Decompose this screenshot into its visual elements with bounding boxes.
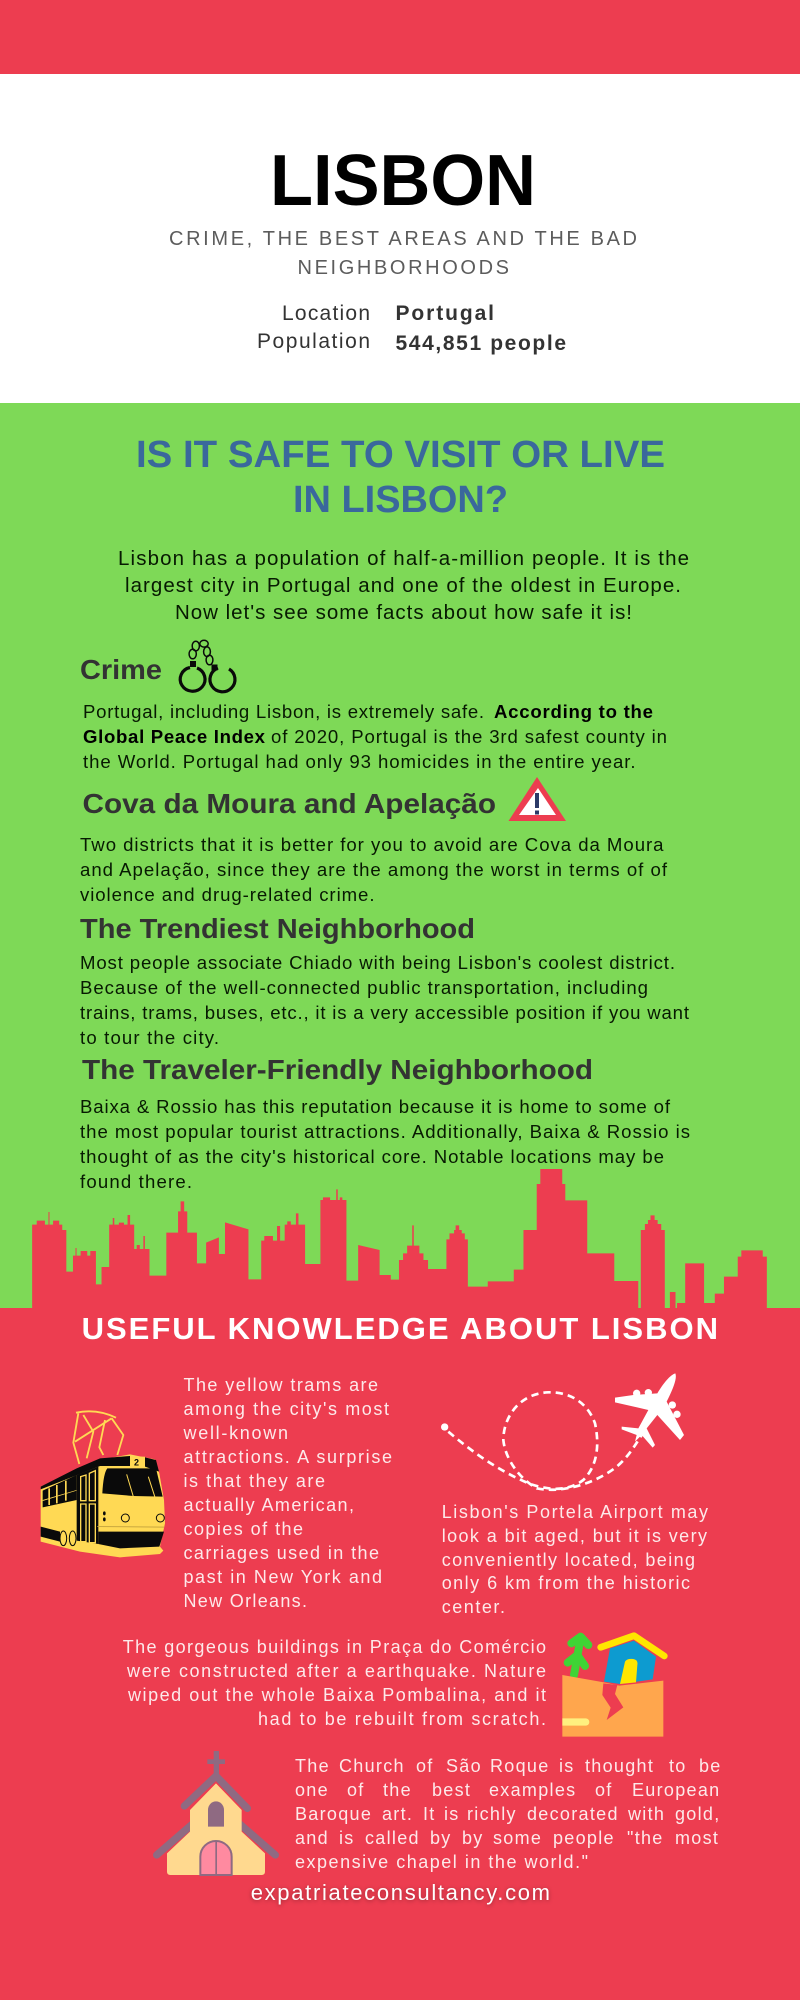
panel: useful knowledge	[0, 1308, 800, 2000]
church text: richly	[467, 1804, 523, 1824]
church text: art.	[382, 1804, 420, 1824]
tram text: past in New York and	[184, 1567, 382, 1587]
church text: "the	[627, 1828, 670, 1848]
panel: safety	[0, 403, 800, 1308]
Cova da Moura heading: Cova da Moura and Apelação	[82, 788, 496, 819]
icon: earthquake house	[562, 1636, 664, 1737]
church text: of	[595, 1780, 619, 1800]
trendiest text: Most people associate Chiado with being Lisbon's coolest district.	[80, 952, 675, 973]
useful knowledge heading: USEFUL KNOWLEDGE ABOUT LISBON	[82, 1311, 718, 1346]
church text: be	[699, 1756, 722, 1776]
church text: decorated	[527, 1804, 625, 1824]
tram text: carriages used in the	[184, 1543, 379, 1563]
trendiest text: Because of the well-connected public transportation, including	[80, 977, 648, 998]
location and population facts: Population	[257, 330, 370, 353]
Cova da Moura text: Two districts that it is better for you to avoid are Cova da Moura	[80, 834, 664, 855]
church text: is	[339, 1828, 361, 1848]
icon: yellow tram: 2	[134, 1458, 139, 1468]
tram text: well-known	[182, 1423, 288, 1443]
church text: is	[559, 1756, 581, 1776]
panel: top band	[0, 0, 800, 74]
airport text	[442, 1502, 708, 1617]
subtitle: CRIME, THE BEST AREAS AND THE BAD	[169, 228, 637, 250]
church text: of	[416, 1756, 440, 1776]
tram text: among the city's most	[184, 1399, 389, 1419]
church text: some	[493, 1828, 549, 1848]
church text: It	[423, 1804, 442, 1824]
trendiest text: trains, trams, buses, etc., it is a very accessible position if you want	[80, 1002, 690, 1023]
intro text	[118, 547, 689, 624]
church text: and	[295, 1828, 335, 1848]
subtitle	[169, 228, 637, 279]
tram text	[182, 1375, 392, 1611]
footer website: expatriateconsultancy.com	[251, 1880, 550, 1905]
church text: to	[669, 1756, 693, 1776]
airport text: only 6 km from the historic	[442, 1573, 690, 1593]
intro text: Now let's see some facts about how safe it is!	[175, 601, 632, 624]
airport text: Lisbon's Portela Airport may	[442, 1502, 708, 1522]
safety heading: IN LISBON?	[293, 479, 508, 521]
panel: header	[0, 74, 800, 403]
crime text: According to the	[494, 701, 653, 722]
safety heading: IS IT SAFE TO VISIT OR LIVE	[136, 434, 665, 476]
airport text: conveniently located, being	[442, 1550, 695, 1570]
tram text: attractions. A surprise	[184, 1447, 392, 1467]
church text: people	[553, 1828, 621, 1848]
traveler text: Baixa & Rossio has this reputation because it is home to some of	[80, 1096, 671, 1117]
trendiest text: to tour the city.	[80, 1027, 219, 1048]
church text: São	[446, 1756, 488, 1776]
church text: Church	[339, 1756, 411, 1776]
tram text: is that they are	[184, 1471, 325, 1491]
church text: is	[444, 1804, 466, 1824]
crime text	[83, 701, 667, 772]
icon: warning triangle	[508, 777, 566, 821]
traveler text: found there.	[80, 1171, 192, 1192]
church text: by	[430, 1828, 458, 1848]
traveler text: thought of as the city's historical core. Notable locations may be	[80, 1146, 664, 1167]
crime text: Portugal, including Lisbon, is extremely safe.	[83, 701, 490, 722]
tram text: actually American,	[184, 1495, 354, 1515]
church text: best	[432, 1780, 478, 1800]
church text: Roque	[490, 1756, 556, 1776]
church text: most	[675, 1828, 719, 1848]
crime heading: Crime	[80, 654, 162, 685]
earthquake text: were constructed after a earthquake. Nature	[126, 1661, 546, 1681]
skyline	[32, 1169, 767, 1310]
icon: church	[157, 1751, 275, 1875]
crime text: of 2020, Portugal is the 3rd safest county in	[271, 726, 667, 747]
tram text: copies of the	[184, 1519, 303, 1539]
church text	[295, 1756, 722, 1872]
intro text: Lisbon has a population of half-a-million people. It is the	[118, 547, 689, 570]
earthquake text: wiped out the whole Baixa Pombalina, and it	[127, 1685, 546, 1705]
traveler text	[80, 1096, 690, 1192]
tram text: The yellow trams are	[184, 1375, 378, 1395]
traveler text: the most popular tourist attractions. Additionally, Baixa & Rossio is	[80, 1121, 690, 1142]
location and population facts: Location	[282, 302, 370, 325]
church text: Baroque	[295, 1804, 378, 1824]
icon: airplane and dashed route	[441, 1373, 684, 1490]
church text: by	[462, 1828, 490, 1848]
church text: gold,	[675, 1804, 721, 1824]
crime text: Global Peace Index	[83, 726, 266, 747]
Cova da Moura text	[80, 834, 668, 905]
title: LISBON	[270, 141, 536, 221]
church text: thought	[585, 1756, 660, 1776]
trendiest text	[80, 952, 690, 1048]
icon: handcuffs	[180, 640, 235, 692]
earthquake text: had to be rebuilt from scratch.	[258, 1709, 546, 1729]
subtitle: NEIGHBORHOODS	[298, 257, 509, 279]
church text: of	[347, 1780, 371, 1800]
church text: expensive chapel in the world."	[295, 1852, 588, 1872]
location and population facts: 544,851 people	[396, 332, 566, 355]
traveler heading: The Traveler-Friendly Neighborhood	[82, 1054, 593, 1085]
location and population facts	[257, 302, 566, 355]
trendiest heading: The Trendiest Neighborhood	[80, 913, 475, 944]
church text: one	[295, 1780, 335, 1800]
church text: called	[365, 1828, 426, 1848]
Cova da Moura text: violence and drug-related crime.	[80, 884, 374, 905]
earthquake text: The gorgeous buildings in Praça do Comércio	[123, 1637, 546, 1657]
church text: the	[383, 1780, 418, 1800]
church text: with	[627, 1804, 672, 1824]
church text: The	[295, 1756, 336, 1776]
earthquake text	[123, 1637, 546, 1729]
airport text: look a bit aged, but it is very	[442, 1526, 707, 1546]
icon: yellow tram	[41, 1411, 165, 1557]
Cova da Moura text: and Apelação, since they are the among the worst in terms of of	[80, 859, 668, 880]
church text: European	[632, 1780, 720, 1800]
location and population facts: Portugal	[396, 302, 494, 325]
intro text: largest city in Portugal and one of the oldest in Europe.	[125, 574, 681, 597]
church text: examples	[489, 1780, 583, 1800]
safety heading	[136, 434, 665, 521]
tram text: New Orleans.	[184, 1591, 307, 1611]
crime text: the World. Portugal had only 93 homicides in the entire year.	[83, 751, 636, 772]
airport text: center.	[442, 1597, 505, 1617]
